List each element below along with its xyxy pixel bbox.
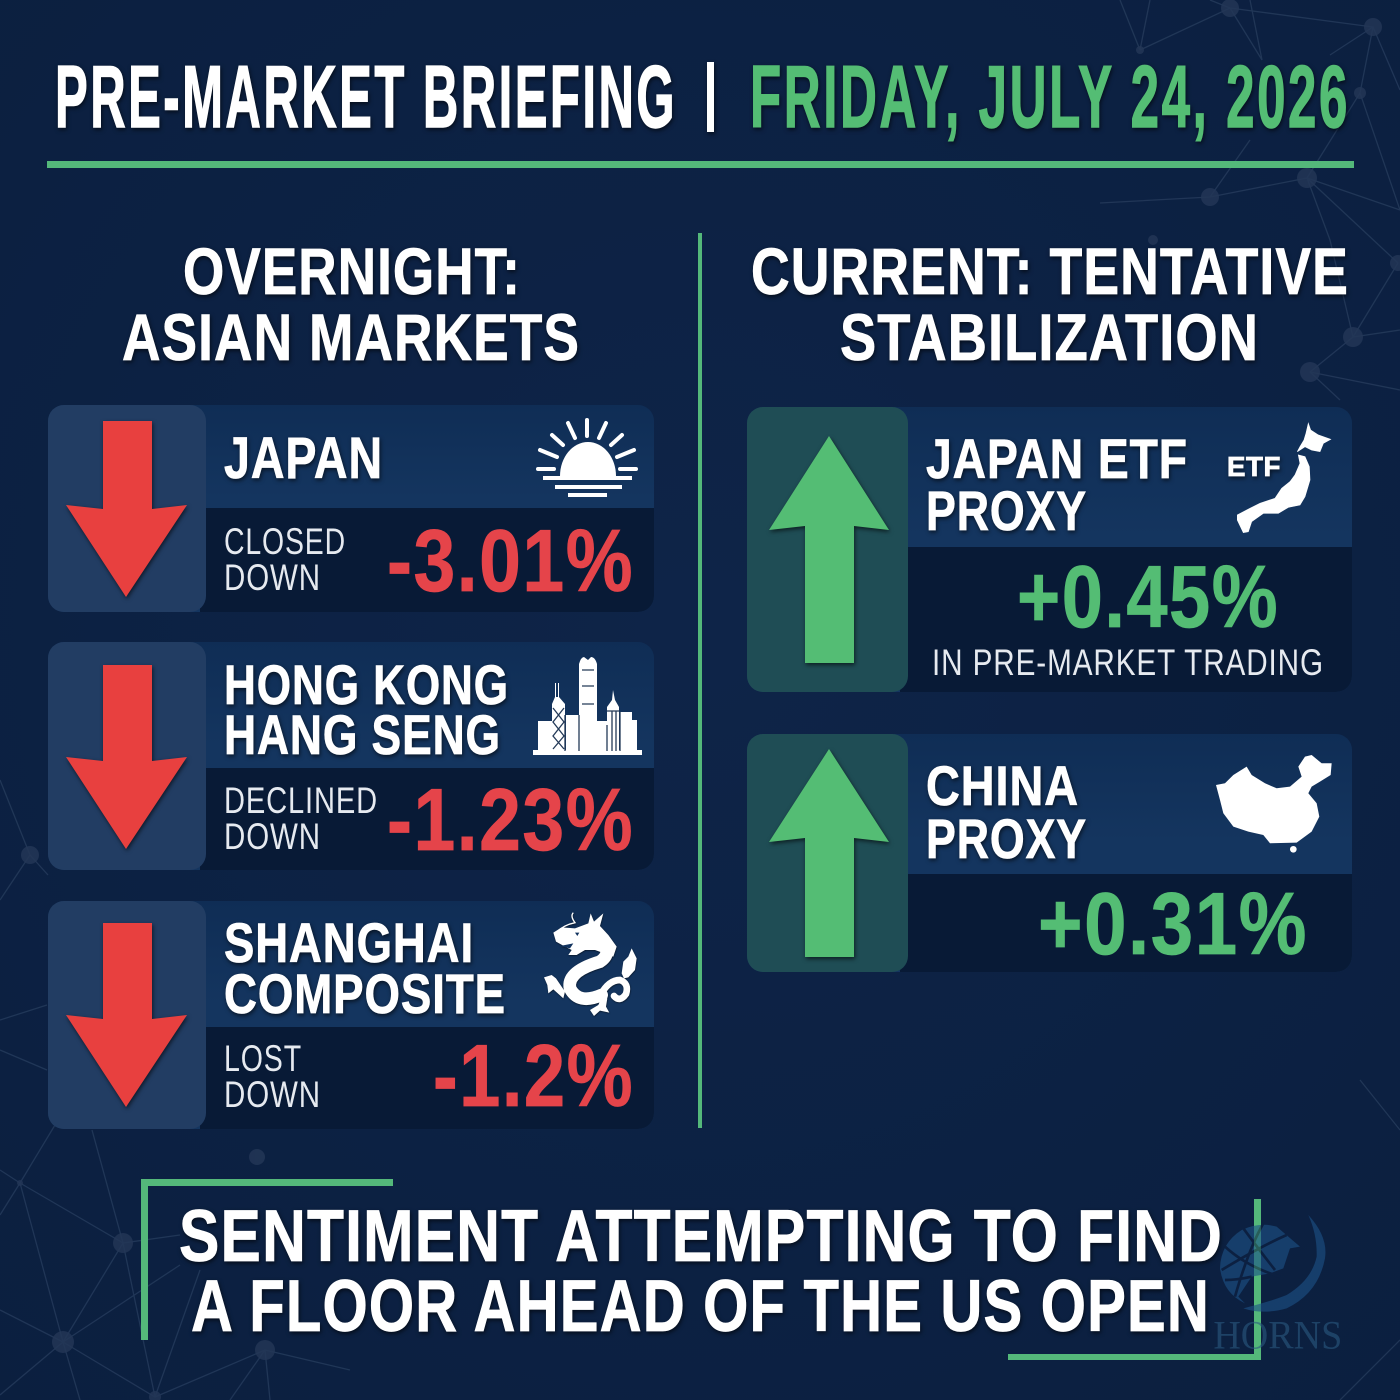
- title: PRE-MARKET BRIEFING: [55, 47, 677, 146]
- value: hang seng: -1.23%: [387, 770, 634, 869]
- label: shanghai composite: [224, 911, 506, 1025]
- value: shanghai: -1.2%: [433, 1026, 634, 1125]
- icon: skyline: [533, 657, 642, 755]
- text: lost down: [224, 1038, 321, 1115]
- label: japan: JAPAN: [224, 426, 383, 491]
- icon: japan map: [1237, 423, 1331, 533]
- label: japan etf proxy: JAPAN ETF: [926, 427, 1188, 490]
- icon: rising sun: [538, 420, 636, 495]
- label: china proxy: [926, 754, 1087, 870]
- value: japan: -3.01%: [387, 511, 634, 610]
- label: china proxy: PROXY: [926, 807, 1087, 870]
- text: lost down: LOST: [224, 1038, 302, 1079]
- logo watermark: HORNS: [1213, 1312, 1342, 1357]
- value: japan etf: +0.45%: [1017, 547, 1279, 646]
- heading: current: [751, 234, 1349, 374]
- icon: up arrow: [769, 749, 889, 957]
- logo watermark: [1213, 1215, 1342, 1357]
- text: declined down: DOWN: [224, 816, 321, 857]
- text: closed down: DOWN: [224, 557, 321, 598]
- text: closed down: [224, 521, 346, 598]
- icon: dragon: [544, 913, 637, 1016]
- label: china proxy: CHINA: [926, 754, 1079, 817]
- panel: japan: [48, 405, 654, 612]
- label: hong kong hang seng: HANG SENG: [224, 703, 501, 766]
- panel: japan etf proxy: [747, 407, 1352, 692]
- label: hong kong hang seng: HONG KONG: [224, 653, 509, 716]
- label: japan etf proxy: [926, 427, 1188, 542]
- panel: shanghai: [48, 901, 654, 1129]
- icon: down arrow: [66, 421, 187, 597]
- icon: up arrow: [769, 436, 889, 663]
- text: lost down: DOWN: [224, 1074, 321, 1115]
- label: shanghai composite: SHANGHAI: [224, 911, 474, 974]
- icon: etf label: ETF: [1227, 451, 1281, 482]
- value: china proxy: +0.31%: [1038, 874, 1308, 973]
- heading: current: STABILIZATION: [840, 300, 1259, 374]
- label: shanghai composite: COMPOSITE: [224, 962, 506, 1025]
- callout: sentiment: [141, 1179, 1261, 1360]
- text: closed down: CLOSED: [224, 521, 346, 562]
- heading: overnight: ASIAN MARKETS: [122, 300, 580, 374]
- icon: down arrow: [66, 665, 187, 849]
- label: hong kong hang seng: [224, 653, 509, 766]
- icon: down arrow: [66, 923, 187, 1107]
- heading: overnight: OVERNIGHT:: [183, 234, 521, 308]
- icon: china map: [1216, 755, 1332, 853]
- label: japan etf proxy: PROXY: [926, 479, 1087, 542]
- callout text: [179, 1196, 1223, 1347]
- text: declined down: DECLINED: [224, 780, 378, 821]
- text: declined down: [224, 780, 378, 857]
- heading: overnight: [122, 234, 580, 374]
- panel: hong kong: [48, 642, 654, 870]
- panel: china proxy: [747, 734, 1352, 973]
